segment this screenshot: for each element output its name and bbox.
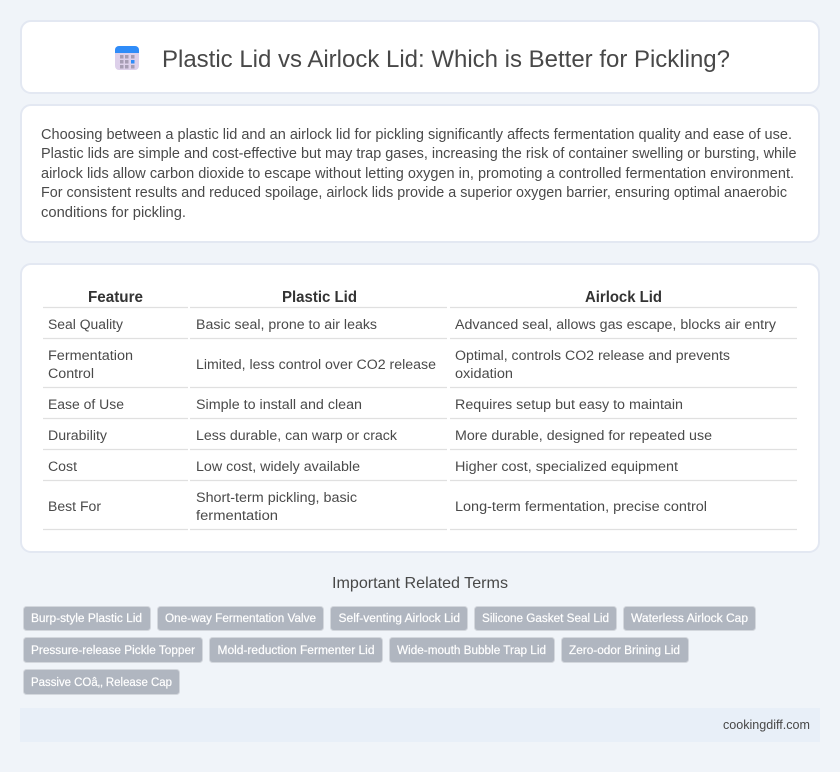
table row: durability: Less durable, can warp or crack [196, 428, 398, 444]
table row: cost: Cost [48, 459, 77, 475]
table row: durability: More durable, designed for repeated use [455, 428, 712, 444]
tag [210, 638, 382, 662]
tag: Zero-odor Brining Lid [569, 643, 680, 657]
tag: Silicone Gasket Seal Lid [482, 611, 609, 625]
title: Plastic Lid vs Airlock Lid: Which is Better for Pickling? [162, 46, 730, 73]
icon: calendar [115, 46, 139, 70]
table row: cost [48, 459, 678, 475]
text block: introduction paragraph: airlock lids allow carbon dioxide to escape without letting oxygen in, promoting a controlled fermentation environment. [41, 166, 794, 182]
tag [562, 638, 688, 662]
tag: Mold-reduction Fermenter Lid [218, 643, 374, 657]
tag: One-way Fermentation Valve [165, 611, 316, 625]
table row: best for: Long-term fermentation, precise control [455, 499, 707, 515]
table row: ease of use: Ease of Use [48, 397, 124, 413]
text block: introduction paragraph: Plastic lids are simple and cost-effective but may trap gases, increasing the risk of container swelling or bursting, while [41, 146, 796, 162]
table row: cost: Low cost, widely available [196, 459, 360, 475]
panel: comparison table [21, 264, 819, 552]
table row: best for: Short-term pickling, basic [196, 490, 357, 506]
panel: introduction [21, 105, 819, 242]
panel: header [21, 21, 819, 93]
footer: cookingdiff.com [723, 717, 810, 732]
table row: best for [48, 490, 707, 524]
table row: fermentation control: oxidation [455, 366, 513, 382]
heading: important related terms: Important Related Terms [332, 575, 508, 592]
table row: durability: Durability [48, 428, 108, 444]
tag: Pressure-release Pickle Topper [31, 643, 195, 657]
tag [624, 606, 756, 630]
tag: Waterless Airlock Cap [631, 611, 748, 625]
tag [158, 606, 324, 630]
text block: introduction paragraph: For consistent results and reduced spoilage, airlock lids provide a superior oxygen barrier, ensuring optimal anaerobic [41, 185, 787, 201]
table header row: Airlock Lid [585, 289, 662, 306]
tag: Passive COâ‚‚ Release Cap [31, 675, 172, 689]
text block: introduction paragraph [41, 127, 796, 221]
tag [330, 606, 468, 630]
tag [24, 638, 202, 662]
table row: fermentation control: Limited, less control over CO2 release [196, 357, 436, 373]
text block: introduction paragraph: conditions for pickling. [41, 205, 186, 221]
tag [474, 606, 616, 630]
tag: Burp-style Plastic Lid [31, 611, 142, 625]
tag: Self-venting Airlock Lid [338, 611, 460, 625]
tag [24, 670, 180, 694]
footer [20, 708, 820, 742]
table row: ease of use: Simple to install and clean [196, 397, 362, 413]
tag: Wide-mouth Bubble Trap Lid [397, 643, 546, 657]
table row: fermentation control: Control [48, 366, 94, 382]
table row: fermentation control: Fermentation [48, 348, 133, 364]
table row: ease of use [48, 397, 683, 413]
table header row [88, 289, 662, 306]
table row: fermentation control: Optimal, controls CO2 release and prevents [455, 348, 730, 364]
table row: fermentation control [48, 348, 730, 382]
tag list: related terms [24, 606, 756, 694]
table row: seal quality: Advanced seal, allows gas escape, blocks air entry [455, 317, 777, 333]
tag [24, 606, 150, 630]
table header row: Plastic Lid [282, 289, 357, 306]
table row: best for: Best For [48, 499, 101, 515]
table row: seal quality: Basic seal, prone to air leaks [196, 317, 377, 333]
table row: cost: Higher cost, specialized equipment [455, 459, 678, 475]
table row: seal quality [48, 317, 777, 333]
table row: seal quality: Seal Quality [48, 317, 124, 333]
table row: best for: fermentation [196, 508, 278, 524]
table header row: Feature [88, 289, 143, 306]
table row: durability [48, 428, 712, 444]
tag [390, 638, 554, 662]
text block: introduction paragraph: Choosing between a plastic lid and an airlock lid for pickling significantly affects fermentation quality and ease of use. [41, 127, 792, 143]
table row: ease of use: Requires setup but easy to maintain [455, 397, 683, 413]
